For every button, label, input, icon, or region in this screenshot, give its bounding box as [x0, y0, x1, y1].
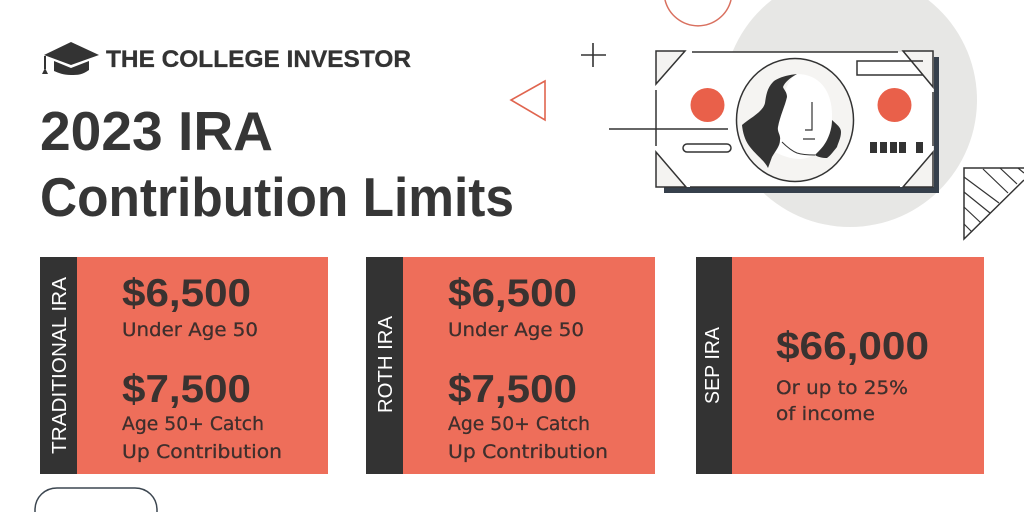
panel: SEP IRA	[696, 257, 984, 474]
bill bottom edge	[690, 186, 900, 188]
nose and mouth	[803, 102, 815, 139]
icon: plus sign	[581, 43, 606, 67]
amount under 50: $6,500	[122, 272, 251, 315]
label: of income	[776, 403, 875, 425]
label: Or up to 25%	[776, 377, 908, 399]
panel background	[40, 257, 328, 474]
hair left	[742, 74, 797, 168]
bill outline	[656, 52, 933, 146]
corner: bottom right	[903, 152, 933, 187]
horizontal line	[609, 128, 728, 130]
label 50 plus: Age 50+ Catch	[122, 413, 264, 435]
corner: top right	[903, 51, 933, 87]
amount 50 plus: $7,500	[122, 368, 251, 411]
label 50 plus: Up Contribution	[122, 441, 282, 463]
side strip	[40, 257, 77, 474]
bill shadow	[664, 57, 939, 193]
corner: bottom left	[656, 152, 686, 187]
title: 2023 IRA	[40, 100, 273, 162]
left red seal	[690, 88, 724, 122]
title: Contribution Limits	[40, 166, 514, 228]
label under 50: Under Age 50	[122, 319, 258, 341]
top right label box	[857, 61, 923, 75]
portrait	[736, 58, 854, 182]
side label: TRADITIONAL IRA	[49, 276, 71, 454]
panel background	[696, 257, 984, 474]
amount under 50: $6,500	[448, 272, 577, 315]
side label: SEP IRA	[702, 326, 724, 404]
pill outline	[683, 144, 731, 152]
rounded outline shape	[35, 488, 157, 512]
panel: Roth IRA	[366, 257, 655, 474]
label 50 plus: Up Contribution	[448, 441, 608, 463]
bill body	[656, 52, 933, 187]
amount: $66,000	[776, 325, 929, 368]
side label: ROTH IRA	[375, 315, 397, 413]
logo	[42, 42, 411, 75]
side strip	[696, 257, 732, 474]
icon: graduation cap	[42, 42, 99, 75]
panel background	[366, 257, 655, 474]
panel: Traditional IRA	[40, 257, 328, 474]
face	[770, 74, 832, 159]
label	[776, 377, 908, 425]
brand name: THE COLLEGE INVESTOR	[106, 46, 411, 73]
label 50 plus: Age 50+ Catch	[448, 413, 590, 435]
label 50 plus	[448, 413, 608, 463]
corner: top left	[656, 51, 685, 84]
hair right	[815, 120, 841, 158]
serial number blocks	[870, 142, 923, 153]
grey background circle	[723, 0, 977, 227]
side strip	[366, 257, 403, 474]
illustration: dollar bill	[609, 51, 939, 193]
title	[40, 100, 514, 228]
jaw line	[782, 142, 815, 155]
amount 50 plus: $7,500	[448, 368, 577, 411]
icon: red outline triangle	[511, 81, 545, 120]
red outline arc	[665, 0, 731, 26]
portrait medallion	[736, 58, 854, 182]
label under 50: Under Age 50	[448, 319, 584, 341]
icon: hatched triangle	[964, 168, 1024, 239]
right red seal	[878, 88, 912, 122]
label 50 plus	[122, 413, 282, 463]
